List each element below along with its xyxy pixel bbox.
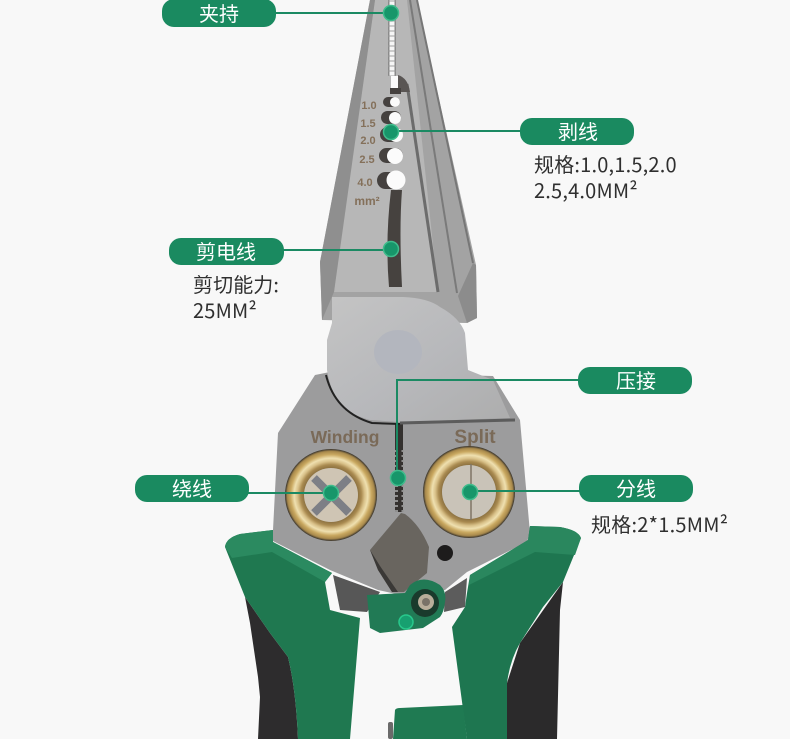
strip spec text: 2.5,4.0MM² [534,175,638,204]
small pin hole [437,545,453,561]
stripping holes [377,97,406,190]
lower plier body [273,372,530,596]
joint shadow [333,575,380,612]
left handle [225,530,360,739]
size scale: 1.0 [361,100,377,112]
callout: split [462,473,693,502]
callout: split: 分线 [616,473,656,502]
callout: cut [169,236,398,265]
split brass ring [423,446,515,538]
callout: clamp [162,0,398,27]
size scale [354,100,380,208]
callout: strip: 剥线 [558,116,598,145]
callout: crimp [390,365,692,486]
callout: crimp: 压接 [616,365,656,394]
lower cylinder [393,705,467,739]
size scale: mm² [354,194,380,208]
callout: cut: 剪电线 [196,236,256,265]
cut spec text [193,269,279,324]
split label: Split [454,427,496,448]
right grip [507,582,563,739]
plier nose [320,0,477,323]
strip spec text: 规格:1.0,1.5,2.0 [534,149,677,178]
left grip [245,597,298,739]
pliers [225,0,581,739]
lower screw [388,722,393,739]
size scale: 1.5 [360,118,376,130]
callout: strip [384,116,634,145]
cutting slit [387,190,402,287]
strip spec text [534,149,677,204]
jaw gap [395,424,403,512]
cut spec text: 剪切能力: [193,269,279,298]
right handle [452,526,581,739]
center crimp hole [370,513,429,592]
serrated jaw slit [388,0,410,94]
size scale: 2.5 [359,154,375,166]
callout: winding: 绕线 [172,473,212,502]
callout: winding [135,473,338,502]
spring clip [367,580,445,633]
cut spec text: 25MM² [193,295,257,324]
winding brass ring [285,449,377,541]
cam piece [326,297,515,424]
winding label: Winding [311,427,379,447]
bottom marker dot [399,615,413,629]
split spec text: 规格:2*1.5MM² [591,509,728,538]
size scale: 2.0 [360,135,376,147]
size scale: 4.0 [357,177,373,189]
